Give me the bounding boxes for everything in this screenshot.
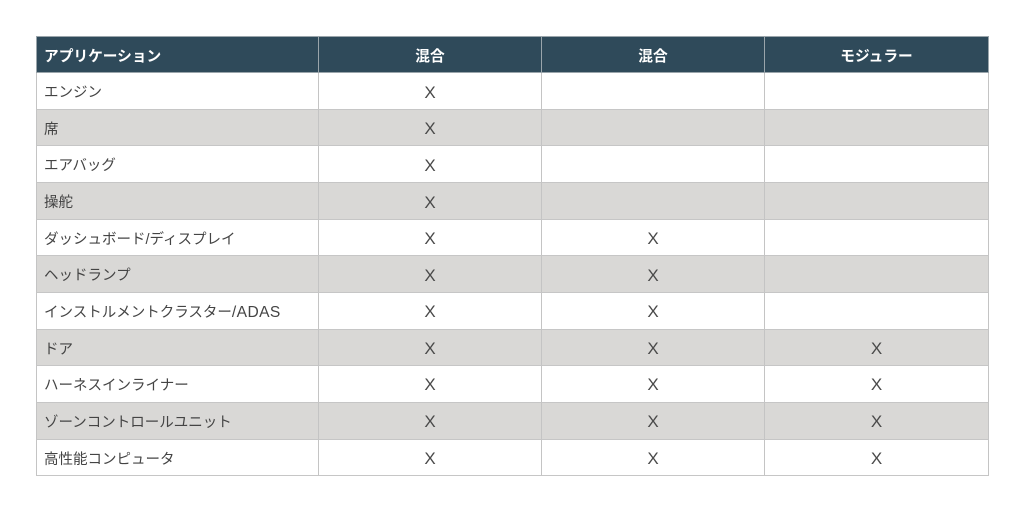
- row: harness inliner: X: [424, 374, 436, 394]
- row: headlamp: [36, 256, 989, 293]
- row: dashboard/display: [36, 220, 989, 256]
- row: harness inliner: [36, 366, 989, 403]
- row: zone control unit: X: [647, 412, 659, 430]
- row: instrument cluster/ADAS: X: [424, 302, 436, 320]
- table header row: [36, 36, 989, 73]
- table header row: アプリケーション: [44, 48, 161, 64]
- row: zone control unit: ゾーンコントロールユニット: [44, 415, 232, 431]
- row: seat: [36, 110, 989, 146]
- row: airbag: X: [424, 156, 436, 174]
- row: dashboard/display: ダッシュボード/ディスプレイ: [44, 232, 236, 248]
- row: headlamp: ヘッドランプ: [44, 268, 131, 284]
- row: seat: 席: [44, 122, 58, 138]
- table header row: モジュラー: [840, 48, 913, 64]
- row: harness inliner: X: [647, 374, 659, 394]
- row: instrument cluster/ADAS: [36, 293, 989, 330]
- row: door: X: [424, 339, 436, 358]
- row: airbag: [36, 146, 989, 183]
- row: seat: X: [424, 119, 436, 138]
- table header row: 混合: [638, 48, 668, 64]
- row: engine: X: [424, 82, 436, 102]
- row: dashboard/display: X: [424, 229, 436, 248]
- row: high performance computer: X: [647, 449, 659, 468]
- row: instrument cluster/ADAS: インストルメントクラスター/ADAS: [44, 304, 281, 321]
- row: door: ドア: [44, 342, 73, 358]
- row: door: X: [871, 339, 882, 358]
- row: engine: [36, 73, 989, 110]
- row: steering: [36, 183, 989, 220]
- row: headlamp: X: [424, 266, 436, 284]
- row: headlamp: X: [647, 266, 659, 284]
- row: airbag: エアバッグ: [44, 158, 116, 174]
- row: steering: X: [424, 192, 436, 212]
- row: zone control unit: [36, 403, 989, 440]
- row: high performance computer: [36, 440, 989, 476]
- row: door: [36, 330, 989, 366]
- row: steering: 操舵: [44, 195, 73, 211]
- row: dashboard/display: X: [647, 229, 659, 248]
- row: instrument cluster/ADAS: X: [647, 302, 659, 320]
- table header row: 混合: [415, 48, 445, 64]
- row: door: X: [647, 339, 659, 358]
- row: harness inliner: ハーネスインライナー: [44, 378, 189, 394]
- row: zone control unit: X: [871, 412, 882, 430]
- row: high performance computer: X: [871, 449, 882, 468]
- row: high performance computer: X: [424, 449, 436, 468]
- row: harness inliner: X: [871, 374, 882, 394]
- row: high performance computer: 高性能コンピュータ: [44, 452, 174, 468]
- row: engine: エンジン: [44, 85, 102, 101]
- row: zone control unit: X: [424, 412, 436, 430]
